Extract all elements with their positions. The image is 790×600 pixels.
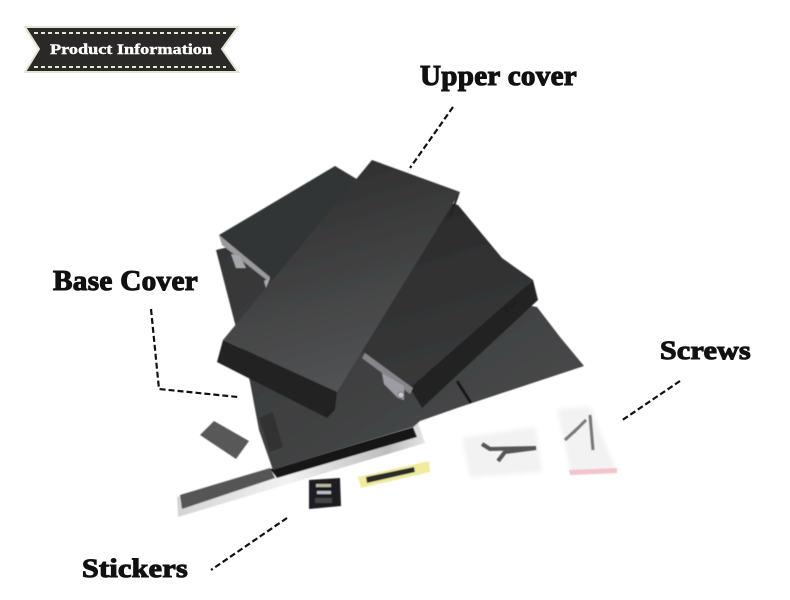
silicone pad <box>200 421 249 459</box>
label: screws: Screws <box>660 336 751 365</box>
callout line: screws <box>621 381 680 421</box>
label: upper cover: Upper cover <box>420 61 577 92</box>
screw bag left <box>462 427 542 477</box>
callout line: stickers <box>211 518 287 570</box>
callout line: base cover <box>151 309 238 397</box>
banner: product information: Product Information <box>50 42 213 58</box>
yellow sticker <box>358 461 430 488</box>
upper cover <box>217 160 460 418</box>
banner: product information <box>25 27 238 72</box>
callout line: upper cover <box>410 107 453 168</box>
right lower cover: PS4 <box>502 297 520 314</box>
screw bag right <box>557 407 617 475</box>
back-left panel <box>219 166 375 295</box>
long sticker strip <box>177 420 425 517</box>
base cover sheet <box>216 230 584 470</box>
label: stickers: Stickers <box>82 554 188 583</box>
right lower cover <box>345 200 538 408</box>
sticker sheet <box>309 478 341 509</box>
label: base cover: Base Cover <box>53 266 198 297</box>
product photo: covers <box>216 160 584 470</box>
